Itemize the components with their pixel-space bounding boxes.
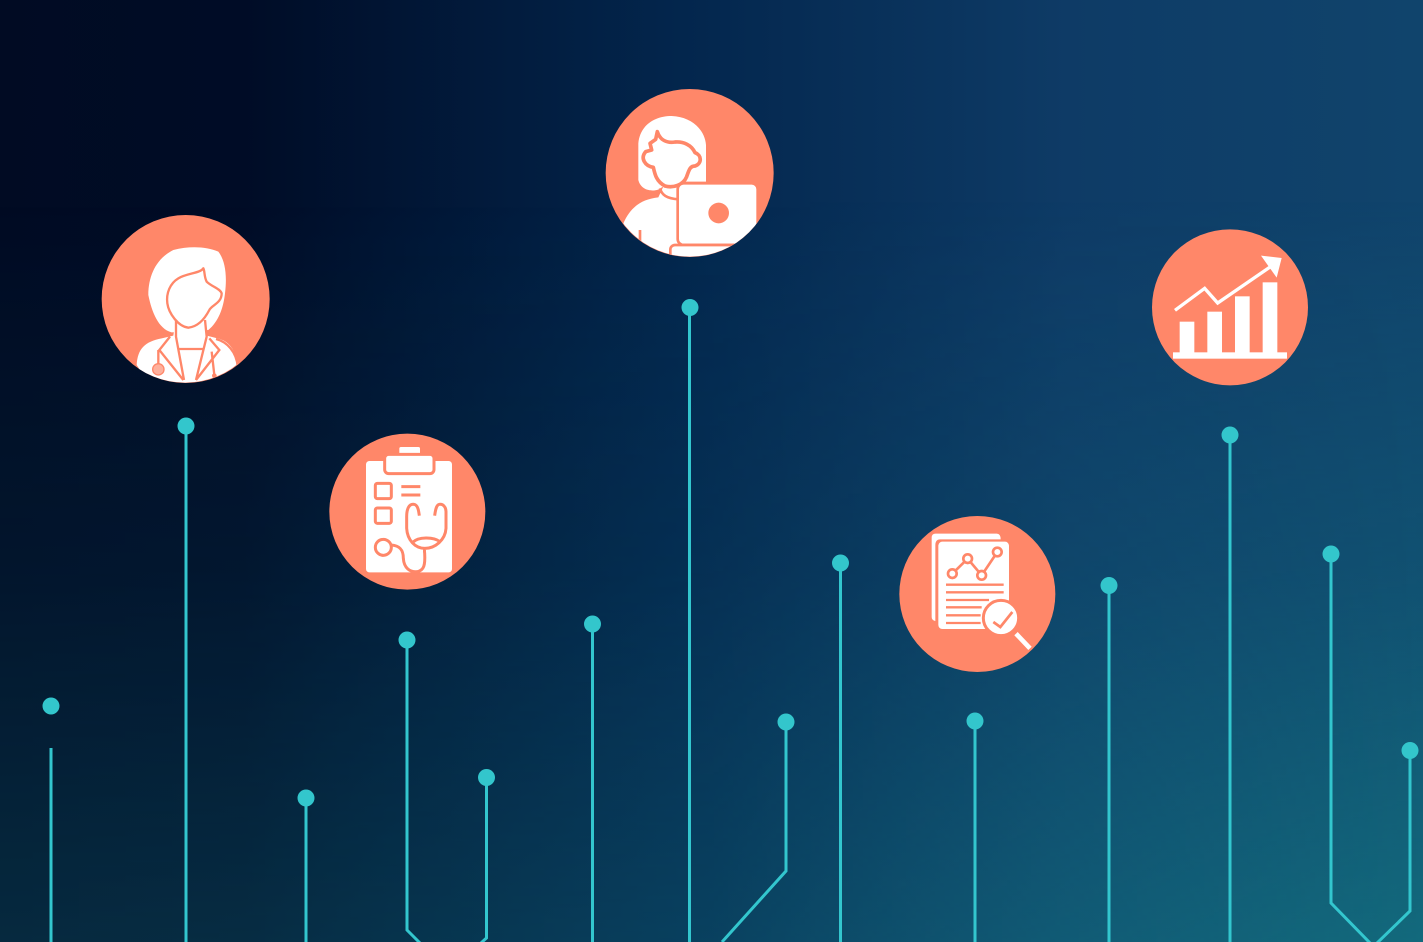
node line 8 [722,714,794,942]
node line 9 [832,554,849,942]
node line 5 [478,769,495,942]
node line 6 [584,616,601,942]
node line 2 [178,418,194,942]
node line 13 [1322,546,1372,942]
icon: rising bar chart [1152,229,1308,385]
node line 3 [298,790,314,942]
connector lines and nodes [42,299,1418,942]
node line 1 [42,698,60,942]
node line 12 [1222,426,1238,942]
icon: clipboard with stethoscope [329,434,485,590]
node line 4 [398,632,420,942]
icon: report with magnifier [899,516,1055,672]
icon: woman with laptop [606,89,774,262]
node line 10 [966,712,984,942]
node line 7 [682,299,698,942]
node line 14 [1375,742,1418,942]
node line 11 [1100,577,1118,942]
icon: doctor [102,215,270,385]
